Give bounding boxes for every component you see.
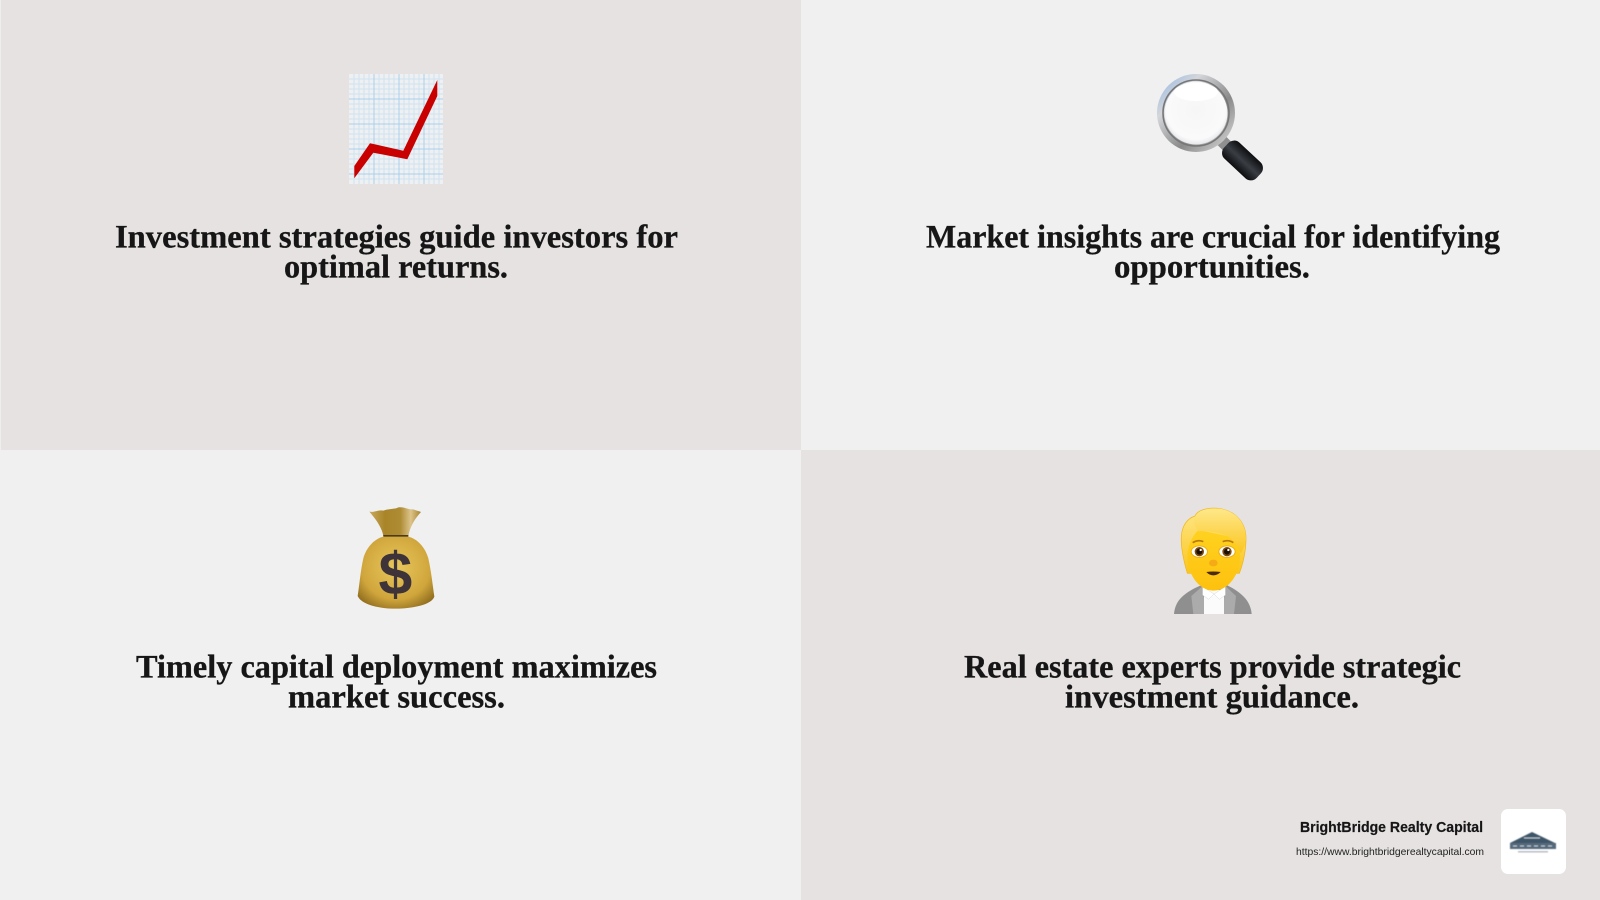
website url: https://www.brightbridgerealtycapital.com bbox=[1296, 846, 1484, 858]
heading: real estate experts: investment guidance. bbox=[1065, 680, 1359, 716]
icon: rising chart bbox=[349, 74, 443, 184]
logo bbox=[1501, 809, 1566, 874]
brand footer bbox=[1296, 809, 1566, 874]
brand name: BrightBridge Realty Capital bbox=[1300, 820, 1483, 836]
heading: capital deployment: Timely capital deployment maximizes bbox=[136, 650, 657, 686]
heading: market insights bbox=[926, 220, 1500, 286]
panel: capital deployment bbox=[0, 450, 801, 900]
heading: market insights: Market insights are crucial for identifying bbox=[926, 220, 1500, 256]
icon: money bag: $ bbox=[378, 539, 412, 607]
heading: real estate experts bbox=[964, 650, 1461, 716]
icon: money bag bbox=[358, 507, 434, 609]
heading: market insights: opportunities. bbox=[1114, 250, 1310, 286]
heading: capital deployment: market success. bbox=[288, 680, 505, 716]
heading: real estate experts: Real estate experts provide strategic bbox=[964, 650, 1461, 686]
heading: capital deployment bbox=[136, 650, 657, 716]
icon: office worker bbox=[1174, 508, 1252, 614]
panel: market insights bbox=[801, 0, 1600, 450]
icon: magnifying glass bbox=[1157, 74, 1266, 184]
heading: investment strategies: Investment strategies guide investors for bbox=[115, 220, 678, 256]
panel: real estate experts bbox=[801, 450, 1600, 900]
heading: investment strategies bbox=[115, 220, 678, 286]
heading: investment strategies: optimal returns. bbox=[284, 250, 508, 286]
panel: investment strategies bbox=[0, 0, 801, 450]
